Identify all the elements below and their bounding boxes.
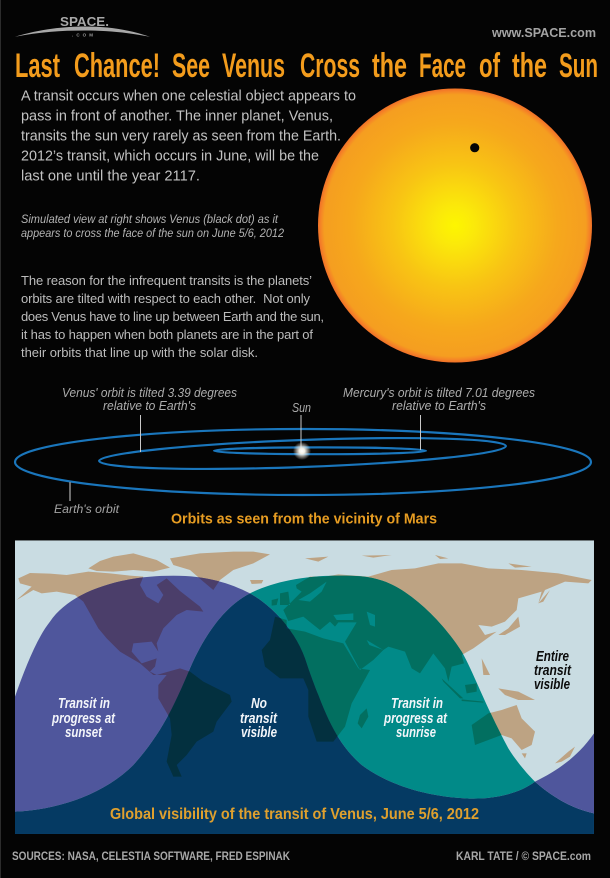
label: Venus orbit: Venus' orbit is tilted 3.39 degrees: [62, 386, 237, 400]
explanation text block: their orbits that line up with the solar disk.: [21, 345, 258, 360]
explanation text block: does Venus have to line up between Earth and the sun,: [21, 309, 324, 324]
website url: www.SPACE.com: [491, 26, 596, 40]
label: Mercury orbit: [343, 386, 535, 413]
label: Earth's orbit: Earth's orbit: [54, 502, 120, 516]
label: Mercury orbit: relative to Earth's: [392, 399, 486, 413]
icon: Venus black dot: [470, 143, 479, 152]
map caption: Global visibility of the transit of Venus, June 5/6, 2012: [110, 806, 479, 823]
title: the: [512, 47, 547, 85]
title: Last: [15, 47, 60, 85]
label: entire transit visible: transit: [534, 663, 572, 679]
region: no transit: [15, 594, 594, 834]
footer: credit: KARL TATE / © SPACE.com: [456, 851, 591, 863]
caption: simulated view: appears to cross the face of the sun on June 5/6, 2012: [21, 228, 285, 240]
Venus' orbit: [99, 433, 506, 474]
label: Sun: Sun: [292, 401, 311, 415]
title: Cross: [300, 47, 360, 85]
footer: sources: SOURCES: NASA, CELESTIA SOFTWARE, FRED ESPINAK: [12, 851, 291, 863]
label: no transit: visible: [241, 725, 277, 741]
orbit diagram heading: Orbits as seen from the vicinity of Mars: [171, 510, 437, 528]
orbit diagram: [15, 386, 591, 516]
world visibility map: [15, 540, 594, 834]
title: Face: [419, 47, 466, 85]
intro text block: pass in front of another. The inner planet, Venus,: [21, 108, 333, 124]
label: transit at sunset: sunset: [65, 725, 103, 741]
sun with Venus dot: [318, 88, 592, 362]
explanation text block: [21, 273, 324, 360]
logo: SPACE.com: [15, 14, 150, 38]
label: entire transit visible: Entire: [536, 649, 569, 665]
label: Mercury orbit: Mercury's orbit is tilted 7.01 degrees: [343, 386, 535, 400]
label: no transit: [240, 696, 278, 741]
ocean: [15, 540, 594, 834]
intro text block: 2012’s transit, which occurs in June, will be the: [21, 148, 319, 164]
caption: simulated view: [21, 214, 285, 240]
label: no transit: No: [251, 696, 267, 712]
land: [17, 552, 592, 777]
leader lines: [70, 415, 420, 501]
title: Venus: [222, 47, 285, 85]
label: entire transit visible: [534, 649, 572, 693]
intro text block: transits the sun very rarely as seen from the Earth.: [21, 128, 341, 144]
label: entire transit visible: visible: [534, 677, 570, 693]
sun glow: [293, 442, 311, 460]
region: transit at sunrise: [250, 576, 535, 798]
intro text block: [21, 88, 356, 184]
label: transit at sunrise: progress at: [383, 711, 448, 727]
Earth's orbit: [15, 429, 591, 495]
label: transit at sunset: progress at: [51, 711, 116, 727]
label: no transit: transit: [240, 711, 278, 727]
label: transit at sunset: [51, 696, 116, 741]
caption: simulated view: Simulated view at right shows Venus (black dot) as it: [21, 214, 279, 226]
label: Venus orbit: relative to Earth's: [103, 399, 196, 413]
region: sunset in far east: [535, 733, 594, 813]
label: transit at sunrise: [383, 696, 448, 741]
label: transit at sunrise: sunrise: [396, 725, 436, 741]
Mercury's orbit: [214, 447, 426, 454]
title: See: [172, 47, 210, 85]
title: of: [479, 47, 500, 85]
title: the: [372, 47, 407, 85]
label: transit at sunset: Transit in: [58, 696, 110, 712]
title: [15, 47, 598, 85]
logo: SPACE.com: SPACE.: [60, 14, 109, 29]
explanation text block: The reason for the infrequent transits is the planets’: [21, 273, 312, 288]
title: Chance!: [74, 47, 160, 85]
explanation text block: it has to happen when both planets are in the part of: [21, 327, 313, 342]
intro text block: A transit occurs when one celestial object appears to: [21, 88, 356, 104]
label: transit at sunrise: Transit in: [391, 696, 443, 712]
label: Venus orbit: [62, 386, 237, 413]
region: transit at sunset: [15, 576, 250, 812]
explanation text block: orbits are tilted with respect to each other. Not only: [21, 291, 310, 306]
logo: SPACE.com: .COM: [72, 32, 93, 38]
intro text block: last one until the year 2117.: [21, 168, 200, 184]
